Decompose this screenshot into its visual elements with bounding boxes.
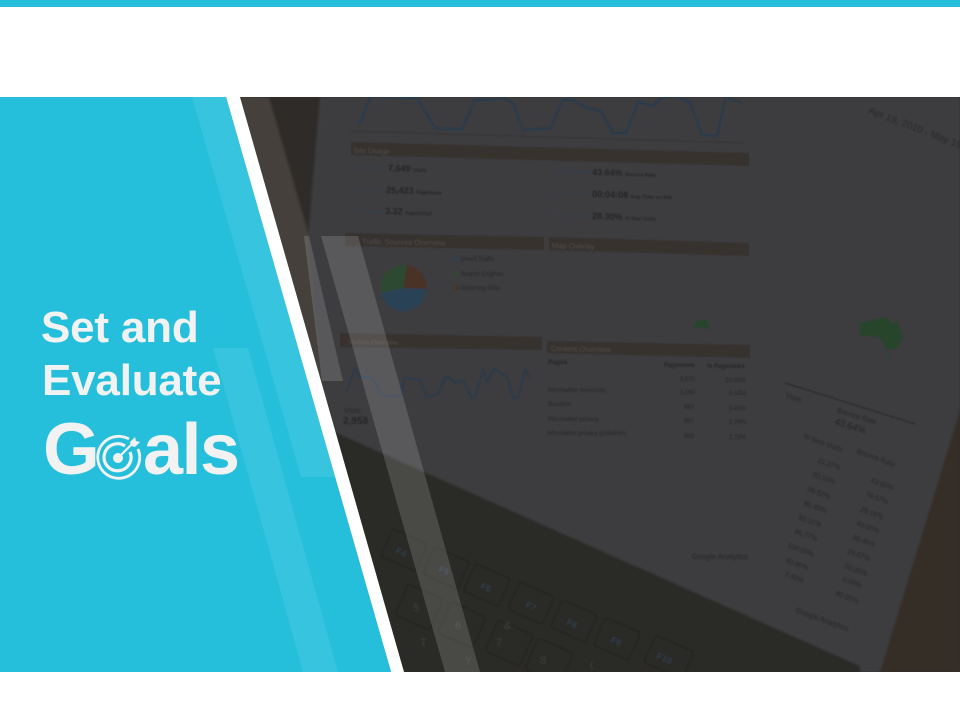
rotated report table: 98.52% bbox=[806, 486, 831, 501]
rotated report table: 43.64% bbox=[833, 416, 868, 437]
dimmed photo of analytics report and keyboard: 8 bbox=[540, 655, 546, 667]
rotated report table: 40.00% bbox=[784, 557, 809, 572]
report text: Information privacy guidelines bbox=[547, 431, 626, 437]
rotated report table: Bounce Rate bbox=[855, 448, 896, 469]
keyboard labels: F10 bbox=[655, 651, 673, 666]
dimmed photo of analytics report and keyboard: T bbox=[420, 637, 427, 649]
keyboard labels: F4 bbox=[394, 546, 408, 559]
rotated report table: Google Analytics bbox=[794, 605, 850, 633]
cyan panel bbox=[0, 97, 391, 672]
rotated report table bbox=[783, 383, 915, 633]
report text: Referring Sites bbox=[461, 286, 501, 292]
rotated report table: 7.40% bbox=[783, 571, 804, 585]
rotated report table: 50.00% bbox=[843, 563, 868, 578]
cyan light band: upper bbox=[192, 97, 335, 477]
line chart: top bbox=[360, 97, 742, 136]
report text: Information resources bbox=[548, 388, 606, 394]
line chart: visitors bbox=[346, 368, 530, 398]
metric sparklines bbox=[358, 172, 564, 216]
dimmed photo of analytics report and keyboard: ( bbox=[590, 659, 594, 671]
rotated report table: % New Visits bbox=[802, 433, 843, 454]
rotated report table: 80.16% bbox=[811, 471, 836, 486]
report text: 7,649 Visits bbox=[388, 163, 427, 174]
report text: 3.32 Pages/Visit bbox=[385, 206, 432, 217]
report text: 5,532 bbox=[680, 377, 696, 383]
report text: Visits bbox=[344, 408, 361, 415]
dimmed photo of analytics report and keyboard bbox=[226, 97, 960, 684]
cyan light band: lower bbox=[213, 348, 338, 672]
keyboard keys bbox=[662, 670, 663, 671]
title bbox=[41, 303, 239, 490]
dimmed photo of analytics report and keyboard: Y bbox=[465, 655, 473, 667]
report text: Direct Traffic bbox=[461, 257, 495, 263]
rotated report table: 0.00% bbox=[841, 576, 862, 590]
map: large Australia bbox=[860, 317, 903, 357]
report text: Search Engines bbox=[461, 272, 503, 278]
dimmed photo of analytics report and keyboard: 6 bbox=[455, 620, 461, 632]
report heading bars bbox=[340, 142, 750, 358]
report text: 43.64% Bounce Rate bbox=[592, 167, 656, 179]
rotated report table: 92.31% bbox=[797, 514, 822, 529]
report text: Map Overlay bbox=[552, 241, 595, 251]
report text: % Pageviews bbox=[707, 364, 745, 370]
rotated report table: 29.57% bbox=[846, 548, 871, 563]
dimmed photo of analytics report and keyboard: 7 bbox=[496, 637, 502, 649]
report text bbox=[343, 146, 748, 561]
report text: Pages bbox=[548, 359, 568, 366]
report text: Services bbox=[548, 402, 571, 408]
report text: 00:04:08 Avg. Time on Site bbox=[592, 189, 673, 201]
keyboard labels bbox=[394, 546, 673, 666]
report text: 28.30% % New Visits bbox=[592, 211, 656, 223]
report text: 2.72% bbox=[729, 435, 747, 441]
title line: Set and: Set and bbox=[41, 303, 199, 352]
report text: Content Overview bbox=[551, 344, 611, 354]
keyboard labels: F6 bbox=[479, 581, 493, 594]
top accent bar bbox=[0, 0, 960, 7]
report text: Pageviews bbox=[664, 363, 695, 369]
title line: Evaluate: Evaluate bbox=[42, 356, 221, 405]
dimmed photo of analytics report and keyboard: 5 bbox=[413, 602, 419, 614]
dimmed photo of analytics report and keyboard: & bbox=[504, 620, 512, 632]
report text: 25,423 Pageviews bbox=[386, 185, 442, 196]
keyboard labels: F9 bbox=[609, 635, 623, 648]
rotated report table: 40.00% bbox=[855, 520, 880, 535]
chart axis line bbox=[350, 131, 745, 143]
report text: Information privacy bbox=[548, 417, 599, 423]
keyboard labels: F5 bbox=[437, 564, 451, 577]
rotated report table: Visits bbox=[784, 392, 803, 405]
report text: 867 bbox=[684, 405, 695, 411]
rotated report table: 43.86% bbox=[869, 477, 894, 492]
translucent wedge over photo bbox=[304, 236, 343, 381]
report text: Visitors Overview bbox=[348, 339, 398, 347]
report text: 9.14% bbox=[729, 391, 747, 397]
map: small Australia bbox=[693, 319, 709, 330]
rotated report table: 95.45% bbox=[802, 500, 827, 515]
rotated report table: 74.57% bbox=[864, 491, 889, 506]
translucent band over photo bbox=[321, 236, 480, 672]
report text: 2,958 bbox=[343, 416, 368, 427]
rotated report table: Bounce Rate bbox=[836, 407, 877, 426]
report text: 1,000 bbox=[680, 390, 696, 396]
title word: als: als bbox=[143, 410, 239, 490]
title word: G: G bbox=[43, 409, 100, 490]
report text: Traffic Sources Overview bbox=[362, 237, 446, 247]
report text: 2.79% bbox=[729, 420, 747, 426]
report text: 3.41% bbox=[729, 406, 747, 412]
rotated report table: 80.00% bbox=[834, 590, 859, 605]
report text: 897 bbox=[684, 419, 695, 425]
legend markers bbox=[455, 257, 459, 290]
rotated report table: 21.27% bbox=[816, 457, 841, 472]
report text: Google Analytics bbox=[692, 552, 748, 561]
keyboard labels: F8 bbox=[565, 617, 579, 630]
pie chart bbox=[380, 265, 427, 311]
report text: Site Usage bbox=[353, 146, 390, 156]
rotated report table: 38.46% bbox=[851, 534, 876, 549]
white diagonal stripe bbox=[226, 97, 404, 672]
report text: 23.33% bbox=[725, 378, 746, 384]
icon: target with arrow bbox=[98, 436, 140, 478]
keyboard labels: F7 bbox=[524, 600, 538, 613]
rotated report table: 28.19% bbox=[859, 506, 884, 521]
report text: 593 bbox=[684, 434, 695, 440]
rotated report table: 100.00% bbox=[786, 542, 815, 558]
rotated report table: 96.77% bbox=[793, 528, 818, 543]
